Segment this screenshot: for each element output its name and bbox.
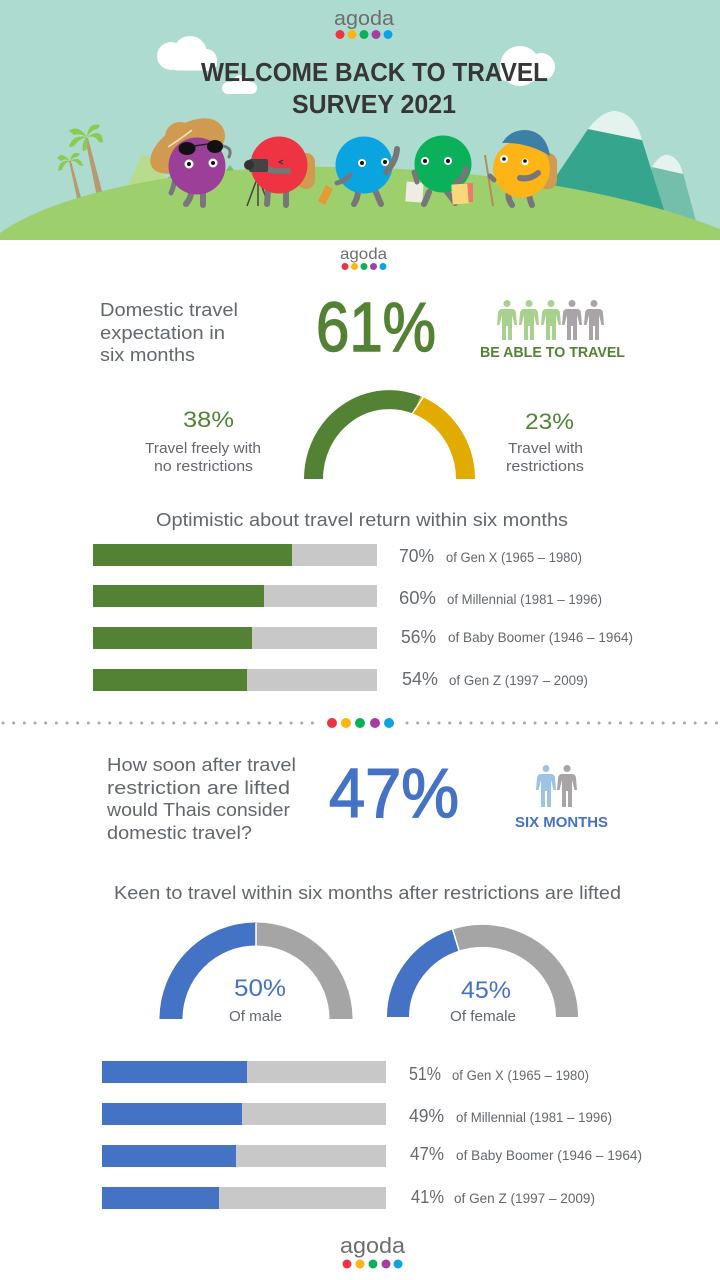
text: domestic travel expectation: six months	[100, 345, 195, 365]
bar: Gen X 51%: of Gen X (1965 – 1980)	[452, 1068, 589, 1083]
bar: Baby Boomer 56%	[93, 627, 633, 649]
character: purple traveller with hat	[141, 107, 231, 205]
title: SURVEY 2021	[292, 91, 456, 119]
text: domestic travel expectation	[100, 300, 238, 365]
bar: Gen Z 41%	[102, 1187, 595, 1209]
bar: Gen X 70%	[93, 544, 582, 566]
label: six months: SIX MONTHS	[515, 815, 608, 831]
logo: second agoda	[340, 246, 387, 270]
bar: Gen Z 41%: of Gen Z (1997 – 2009)	[454, 1191, 595, 1206]
bar: Gen X 51%	[102, 1061, 589, 1084]
logo: top agoda	[334, 8, 395, 39]
hill	[0, 167, 720, 240]
bar: Millennial 60%	[93, 585, 602, 608]
icon: two people	[536, 765, 577, 807]
bar chart: keen to travel by generation	[102, 1061, 642, 1209]
logo: second agoda: agoda	[340, 246, 387, 263]
gauge: domestic split	[314, 396, 466, 479]
heading: optimistic about travel return: Optimistic about travel return within six months	[156, 509, 568, 530]
bar: Baby Boomer 47%: of Baby Boomer (1946 – 1964)	[456, 1148, 642, 1163]
heading: keen to travel: Keen to travel within six months after restrictions are lifted	[114, 882, 621, 903]
bar: Millennial 49%	[102, 1103, 612, 1126]
text: how soon after travel restrictions	[106, 755, 296, 843]
gauge: female 45%: Of female	[450, 1009, 516, 1025]
logo: bottom agoda: agoda	[340, 1233, 406, 1258]
gauge: female 45%: 45%	[461, 977, 511, 1004]
title: WELCOME BACK TO TRAVEL	[201, 59, 548, 87]
text: how soon after travel restrictions: How soon after travel	[107, 755, 296, 775]
text: how soon after travel restrictions: would Thais consider	[106, 800, 290, 820]
stat: 23% travel with restrictions: 23%	[525, 409, 574, 434]
palm trees	[57, 124, 103, 203]
bar: Millennial 60%: 60%	[399, 588, 436, 608]
logo: bottom agoda	[340, 1233, 406, 1268]
bar: Gen X 70%: 70%	[399, 546, 434, 566]
character: yellow hiker	[485, 130, 557, 206]
stat: 38% travel freely: no restrictions	[154, 459, 253, 475]
bar: Gen X 70%: of Gen X (1965 – 1980)	[446, 550, 582, 565]
bar: Baby Boomer 56%: of Baby Boomer (1946 – 1964)	[448, 630, 633, 645]
mountains	[540, 111, 697, 225]
bar: Baby Boomer 47%	[102, 1144, 642, 1167]
label: be able to travel: BE ABLE TO TRAVEL	[480, 345, 625, 361]
gauge: male 50%: 50%	[234, 975, 286, 1002]
text: how soon after travel restrictions: restriction are lifted	[107, 778, 290, 798]
bar: Millennial 49%: of Millennial (1981 – 1996)	[456, 1110, 612, 1125]
bar: Gen Z 54%	[93, 669, 588, 691]
stat: 38% travel freely: Travel freely with	[145, 441, 261, 457]
bar chart: optimistic by generation	[93, 544, 633, 691]
bar: Millennial 60%: of Millennial (1981 – 1996)	[447, 592, 602, 607]
bar: Gen Z 54%: of Gen Z (1997 – 2009)	[449, 673, 588, 688]
title	[201, 59, 548, 119]
text: domestic travel expectation: Domestic travel	[100, 300, 238, 320]
divider colour dots	[327, 718, 394, 728]
bar: Baby Boomer 47%: 47%	[410, 1144, 444, 1164]
bar: Gen Z 41%: 41%	[411, 1187, 444, 1207]
bar: Gen Z 54%: 54%	[402, 669, 438, 689]
gauge: male 50%	[171, 923, 341, 1025]
background hills	[126, 155, 238, 192]
stat: 47%: 47%	[329, 754, 459, 832]
stat: 61%: 61%	[316, 288, 436, 366]
bar: Gen X 51%: 51%	[409, 1064, 441, 1084]
stat: 23% travel with restrictions: restrictions	[506, 459, 584, 475]
text: how soon after travel restrictions: domestic travel?	[107, 823, 252, 843]
stat: 38% travel freely: 38%	[183, 407, 234, 432]
icon: five people, three green	[497, 300, 604, 340]
stat: 23% travel with restrictions: Travel with	[508, 441, 583, 457]
stat: 23% travel with restrictions	[506, 409, 584, 475]
character: blue traveller with suitcase	[318, 136, 397, 205]
logo: top agoda: agoda	[334, 8, 395, 30]
text: domestic travel expectation: expectation in	[100, 323, 225, 343]
bar: Baby Boomer 56%: 56%	[401, 627, 436, 647]
cloud: upper left	[157, 36, 217, 71]
gauge: female 45%	[398, 929, 567, 1025]
cloud: small centre	[222, 75, 257, 94]
character: green shopper with bags	[405, 136, 473, 205]
stat: 38% travel freely	[145, 407, 261, 475]
header banner illustration	[0, 0, 720, 240]
character: red photographer	[244, 136, 315, 206]
gauge: male 50%: Of male	[229, 1009, 282, 1025]
cloud: right	[500, 46, 555, 86]
bar: Millennial 49%: 49%	[409, 1106, 444, 1126]
